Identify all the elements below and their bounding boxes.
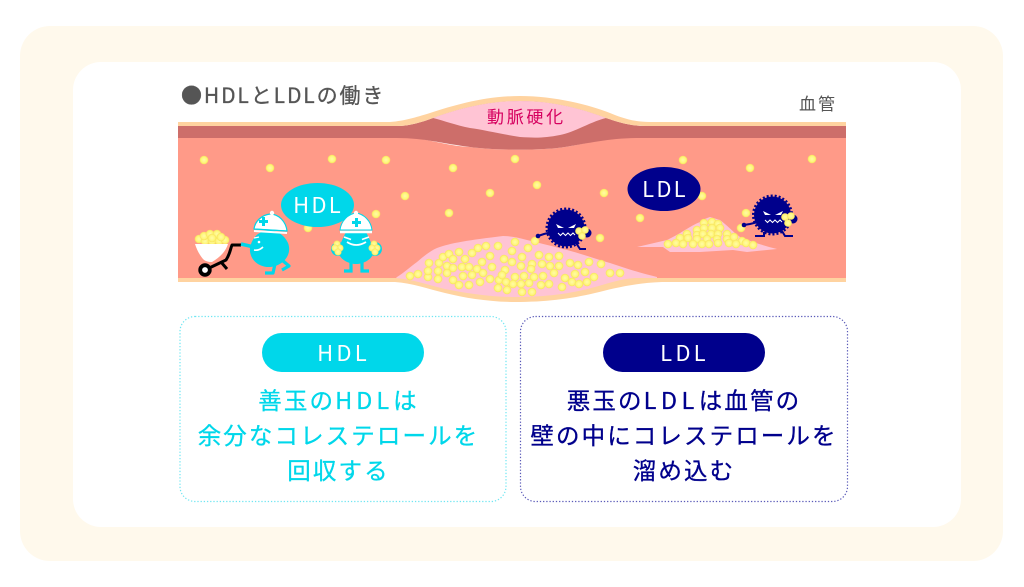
top artery wall [178, 101, 846, 150]
cholesterol in large plaque [406, 238, 624, 296]
HDL pill [262, 333, 424, 372]
LDL message: 溜め込む [633, 452, 735, 486]
label: blood vessel: 血管 [799, 90, 837, 115]
small right plaque [637, 217, 777, 252]
cholesterol in small plaque [664, 218, 757, 249]
LDL badge: LDL [642, 172, 688, 204]
wheelbarrow [195, 230, 241, 275]
heading: ●HDLとLDLの働き [181, 80, 385, 110]
inner white panel [73, 62, 961, 527]
bottom peach wall [178, 278, 846, 302]
label: arteriosclerosis: 動脈硬化 [487, 103, 566, 128]
vessel lumen [178, 137, 846, 279]
HDL pill: HDL [317, 336, 370, 368]
HDL message: 余分なコレステロールを [198, 417, 479, 451]
LDL message: 悪玉のLDLは血管の [567, 382, 801, 416]
atherosclerosis top plaque [433, 101, 606, 138]
HDL worker pushing [241, 211, 289, 273]
HDL worker front [331, 211, 382, 271]
LDL message [530, 382, 838, 486]
LDL monster left [536, 209, 592, 249]
large lower plaque [395, 236, 657, 298]
HDL badge: HDL [293, 188, 343, 220]
LDL pill: LDL [660, 336, 709, 368]
HDL badge [281, 183, 354, 227]
LDL pill [603, 333, 765, 372]
LDL message: 壁の中にコレステロールを [530, 417, 838, 451]
top peach outline [178, 96, 846, 126]
LDL card [520, 316, 848, 502]
LDL badge [628, 167, 700, 211]
HDL message [198, 382, 479, 486]
HDL message: 善玉のHDLは [258, 382, 419, 416]
LDL monster right [742, 196, 798, 236]
HDL message: 回収する [287, 452, 390, 486]
free cholesterol balls [200, 155, 816, 245]
HDL card [179, 316, 507, 502]
